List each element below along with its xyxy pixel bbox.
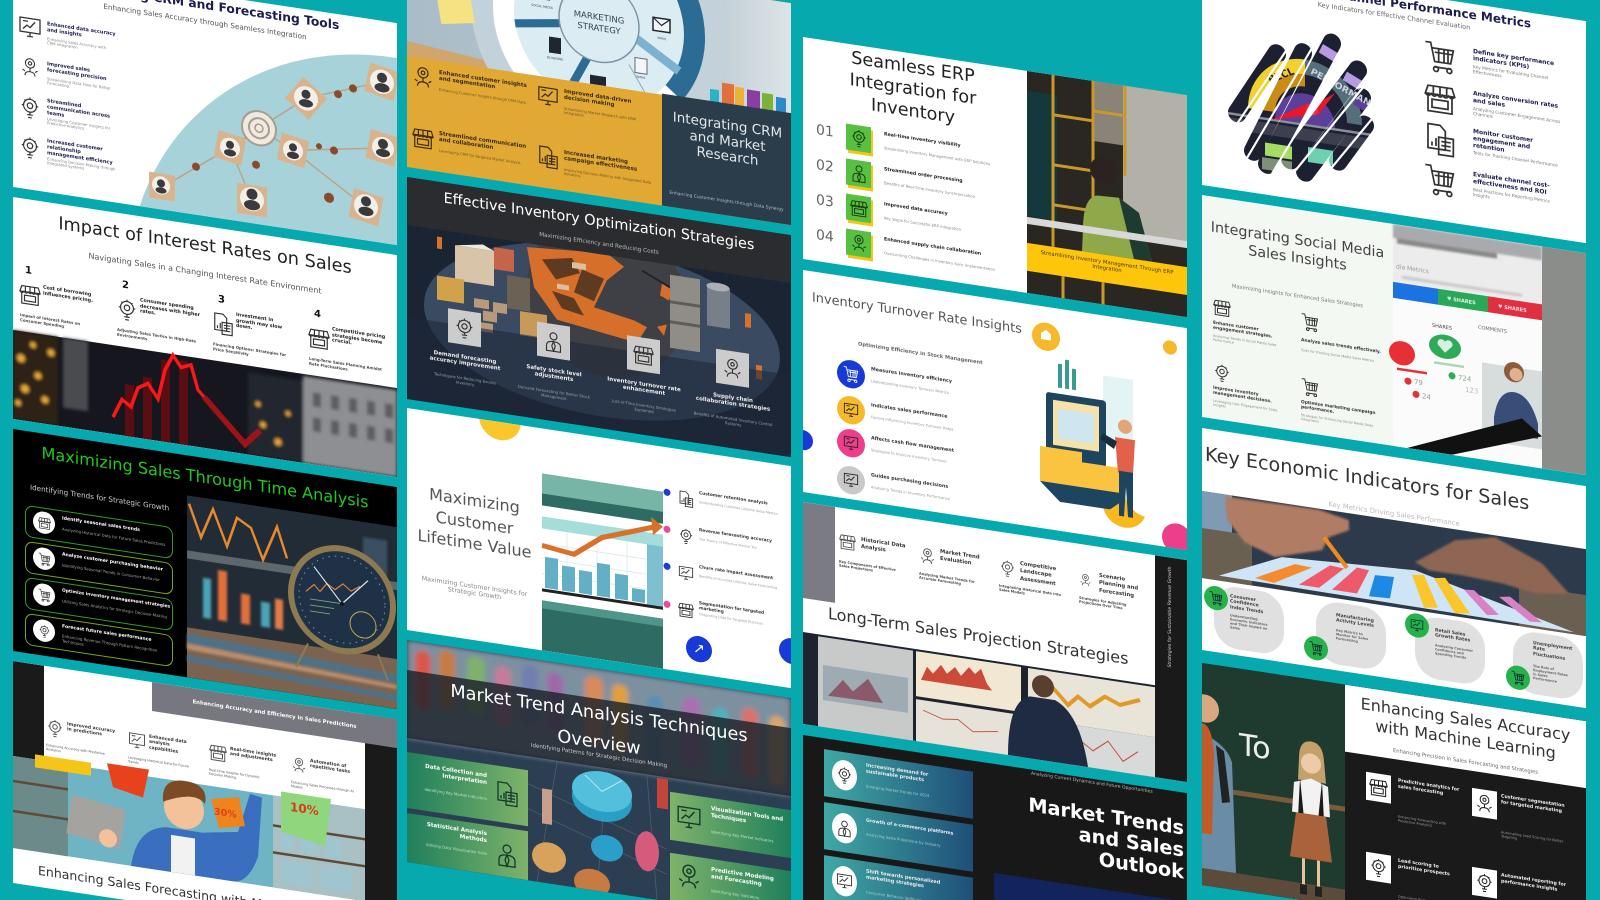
item 2: Analyzing Market Trends for Accurate Forecasting (919, 572, 975, 586)
item: relationship management: Increased customer relationship management efficiency (47, 138, 113, 166)
item: data accuracy: Enhanced data accuracy and insights (47, 21, 116, 38)
strategy 3 (607, 335, 681, 414)
item 2: Revenue forecasting accuracy (699, 528, 772, 544)
panel: market trends and sales outlook slide (803, 735, 1187, 900)
image: wooden tiles network (140, 54, 397, 246)
title: Maximizing Customer Lifetime Value (417, 484, 532, 562)
step 03: Key Steps for Successful ERP Integration (884, 215, 961, 232)
card 3: Shift towards personalized marketing strategies (866, 869, 940, 889)
item 3 (1366, 852, 1471, 900)
item 2: Customer segmentation for targeted marketing (1501, 794, 1565, 814)
item: relationship management: Enhancing Decision-Making through Integrated Systems (47, 156, 115, 171)
item 2: Automating Lead Scoring for Better Targeting (1501, 830, 1563, 844)
strategy 3: Inventory turnover rate enhancement (607, 376, 681, 398)
image: children at chalkboard: To (1238, 728, 1271, 767)
title: with Machine Learning (1375, 716, 1556, 763)
item 4: Integrating Data for Targeted Practices (699, 612, 763, 626)
item 4: Improving Decision-Making with Integrated Data Solutions (564, 168, 651, 185)
item 4 (1472, 867, 1582, 900)
item 1 (839, 531, 917, 589)
item 1: Enhancing Forecasting with Predictive Analytics (1398, 815, 1446, 828)
text panel (662, 94, 791, 225)
banner text: Enhancing Accuracy and Efficiency in Sales Predictions (193, 699, 356, 730)
step 01: Real-time inventory visibility (884, 132, 961, 149)
item 4: Optimize marketing campaign performance. (1301, 400, 1376, 416)
item 4 (539, 145, 651, 185)
image: marketing strategy wheel: EMAIL (657, 36, 667, 41)
card 2: Analyze customer purchasing behavior (62, 552, 163, 573)
metric 2: Indicates sales performance (871, 403, 948, 420)
item 2 (1472, 788, 1582, 864)
title: and Sales (1079, 823, 1184, 862)
icon: blue arrow button: ↗ (693, 640, 705, 658)
item 4: Scenario Planning and Forecasting (1099, 573, 1138, 599)
panel: market trend analysis slide (407, 640, 791, 900)
card 3: Utilizing Sales Analytics for Strategic Decision-Making (62, 598, 167, 619)
image: marketing strategy wheel: BLOGGING (547, 55, 564, 62)
item 3 (1423, 121, 1583, 184)
card 1: Identify seasonal sales trends (62, 516, 140, 533)
item 3: Lead scoring to prioritize prospects (1398, 859, 1450, 877)
item 4: 4 (314, 309, 321, 321)
title: Inventory Turnover Rate Insights (812, 290, 1022, 337)
indicator 3: Analyzing Consumer Confidence and Spending Trends (1435, 643, 1473, 660)
item 3: Leveraging CRM for Targeted Market Analysis (439, 149, 521, 165)
card 3 (824, 855, 973, 900)
step 03 (816, 189, 1021, 250)
subtitle: Identifying Trends for Strategic Growth (30, 483, 169, 513)
item: forecasting precision: Improved sales forecasting precision (47, 61, 107, 82)
item 2: Tools for Tracking Social Media Sales Metrics (1301, 348, 1374, 363)
metric 3: Strategies to Improve Inventory Turnover (871, 448, 947, 464)
subtitle: Navigating Sales in a Changing Interest Rate Environment (89, 251, 321, 296)
item 3: Churn rate impact assessment (699, 565, 773, 581)
title: Integrating CRM and Market Research (673, 109, 782, 169)
title: Effective Inventory Optimization Strategies (444, 191, 754, 254)
card 1 (824, 749, 973, 819)
panel: sales forecasting with machine learning slide (13, 661, 397, 900)
item 1: Enhance customer engagement strategies. (1213, 321, 1272, 340)
item 1: Historical Data Analysis (861, 537, 905, 554)
card 1: Increasing demand for sustainable products (866, 763, 928, 783)
technique: predictive modeling: Predictive Modeling and Forecasting (711, 867, 774, 887)
item 1: Key Metrics for Evaluating Channel Effectiveness (1473, 65, 1548, 81)
metric 4: Guides purchasing decisions (871, 473, 948, 490)
item 1 (19, 265, 93, 328)
item 4: Evaluate channel cost-effectiveness and ROI (1473, 171, 1550, 196)
technique: data collection: Identifying Key Market Indicators (424, 787, 487, 801)
image: shapes and growth chart (479, 418, 670, 669)
indicator 2 (1306, 598, 1391, 677)
technique: visualization tools: Identifying Key Market Indicators (711, 829, 774, 843)
title: Integrating Social Media (1211, 219, 1384, 262)
panel: impact of interest rates slide (13, 197, 397, 477)
technique: statistical analysis: Statistical Analysis Methods (427, 822, 487, 844)
strategy 2 (518, 322, 590, 401)
item 4: Enhancing Sales Processes through AI Models (291, 780, 354, 794)
chart: striped performance gauge: RECL (1266, 66, 1297, 86)
item 1 (46, 720, 115, 756)
item 4 (1301, 376, 1386, 439)
card 2: Growth of e-commerce platforms (866, 819, 953, 837)
title (850, 48, 976, 128)
vertical caption: Strategies for Sustainable Revenue Growth (1168, 566, 1173, 668)
panel: inventory optimization slide (407, 177, 791, 457)
item: data accuracy (19, 16, 116, 50)
panel: long-term sales projection slide (803, 502, 1187, 782)
image: marketing strategy wheel: MARKETING (574, 9, 624, 27)
item 1: Key Components of Effective Sales Projections (839, 559, 896, 573)
title: Enhancing Sales Accuracy (1361, 694, 1570, 745)
panel: key economic indicators slide (1202, 428, 1586, 708)
step 02: 02 (816, 157, 834, 176)
card 4: Enhancing Revenue Through Pattern Recognition Techniques (62, 633, 157, 653)
item 2 (128, 732, 189, 769)
technique: statistical analysis (426, 822, 516, 868)
image: blurred social media dashboard: SHARES (1432, 323, 1452, 332)
banner text: Streamlining Inventory Management Through ERP Integration (1041, 250, 1173, 276)
image: person with clipboard and decorative circles (803, 270, 1187, 550)
item 4 (291, 758, 354, 794)
item 2 (1423, 80, 1583, 143)
step 01: Streamlining Inventory Management with ERP Solutions (884, 145, 990, 166)
image: blurred bokeh and pie chart table (407, 640, 791, 900)
indicator 4: The Role of Employment Rates in Sales Performance (1533, 664, 1568, 683)
title: Long-Term Sales Projection Strategies (828, 604, 1128, 668)
item 3 (412, 128, 526, 165)
technique: statistical analysis: Utilizing Data Visualization Tools (426, 842, 487, 856)
strategy 1 (430, 308, 500, 387)
image: side strips, shop and cartoon shopper: 10% (290, 800, 319, 818)
title: Integration for (850, 70, 976, 109)
item 4 (1079, 568, 1155, 625)
metric 2: Factors Influencing Inventory Turnover Rates (871, 415, 953, 432)
item 3 (209, 744, 276, 780)
image: analyst in front of screens, side strips (803, 502, 1187, 782)
subtitle: Enhancing Precision in Sales Forecasting and Strategies (1393, 748, 1538, 776)
item 1: Understanding Customer Lifetime Value Metrics (699, 500, 778, 516)
item 4: Strategies for Enhancing Social Media Sales Integration (1301, 413, 1373, 428)
item 2: Analyzing Customer Engagement Across Channels (1473, 107, 1560, 125)
chart: striped performance gauge: PERFORMANCE (1309, 67, 1384, 115)
item 1 (680, 490, 778, 516)
image: children at chalkboard (1202, 663, 1586, 900)
item 1: Cost of borrowing influences pricing. (43, 286, 93, 304)
card 3: Optimize inventory management strategies (62, 588, 170, 610)
title: Outlook (1099, 848, 1184, 884)
item: forecasting precision (22, 58, 111, 91)
icon: second blue button (779, 636, 805, 666)
image: orange globe and warehouse models (407, 177, 791, 457)
subtitle: Enhancing Sales Accuracy through Seamless Integration (103, 2, 307, 41)
image: blurred social media dashboard: 724 (1458, 373, 1472, 384)
item 3 (213, 294, 286, 357)
technique: predictive modeling: Identifying Key Indicators (711, 888, 759, 900)
image: blurred social media dashboard: COMMENTS (1478, 325, 1507, 335)
subtitle: Enhancing Customer Insights through Data Synergy (669, 191, 784, 213)
card 2 (25, 541, 173, 595)
card 2 (824, 802, 973, 872)
item 1 (1366, 772, 1471, 848)
item 2: 2 (122, 279, 129, 292)
item 2 (117, 279, 200, 344)
item 4: Long-Term Sales Planning Amidst Rate Fluctuations (309, 356, 382, 372)
title: Sales Insights (1248, 243, 1347, 274)
indicator 1: Consumer Confidence Index Trends (1230, 594, 1263, 615)
item 4 (308, 309, 385, 372)
step 04: 04 (816, 227, 834, 246)
card 1: Emerging Market Trends for 2024 (866, 784, 929, 798)
item 2: Improved data-driven decision making (564, 89, 631, 109)
image: hand drawing bar chart (1202, 428, 1586, 708)
item 1: Improved accuracy in predictions (67, 722, 115, 738)
image: blurred social media dashboard (1202, 195, 1586, 475)
strategy 1: Techniques for Reducing Excess Inventory (434, 371, 496, 387)
item 4: Automated reporting for performance insights (1501, 873, 1566, 892)
item: relationship management (22, 137, 116, 171)
strategy 2: Safety stock level adjustments (526, 364, 582, 384)
panel: social media sales insights slide (1202, 195, 1586, 475)
image: blurred social media dashboard: 123 (1465, 385, 1478, 396)
item 3: Competitive Landscape Assessment (1020, 561, 1056, 587)
image: blurred social media dashboard: ♥ SHARES (1447, 296, 1476, 306)
item 2: Market Trend Evaluation (940, 549, 980, 567)
item 2: Leveraging Historical Data for Future Trends (128, 755, 189, 769)
title (1202, 217, 1393, 282)
subtitle: Maximizing Insights for Enhanced Sales Strategies (1232, 284, 1363, 309)
image: marketing strategy wheel (407, 0, 791, 114)
image: side strips, shop and cartoon shopper: 30% (214, 806, 237, 821)
panel: customer lifetime value slide (407, 408, 791, 688)
image: side strips, shop and cartoon shopper (13, 661, 397, 900)
subtitle: Maximizing Efficiency and Reducing Costs (539, 232, 659, 256)
step 02: Streamlined order processing (884, 167, 963, 184)
indicator 1 (1204, 582, 1289, 661)
indicator 2: Manufacturing Activity Levels (1336, 613, 1374, 629)
card 1 (25, 505, 173, 559)
title: Market Trends (1028, 793, 1184, 840)
image: blurred social media dashboard: dia Metrics (1396, 263, 1429, 275)
icon: blue arrow button (686, 634, 712, 664)
item 2: Streamlining Market Research with CRM Integration (564, 107, 636, 122)
banner (152, 682, 397, 748)
panel: sales accuracy with machine learning slide (1202, 663, 1586, 900)
item 3: Improve inventory management decisions. (1213, 386, 1272, 405)
item 4: Strategies for Adjusting Projections Over Time (1079, 596, 1126, 610)
indicator 4 (1503, 628, 1586, 706)
card 4: Forecast future sales performance (62, 624, 152, 643)
metric 2 (837, 394, 987, 445)
item: communication: Leveraging Customer Insights for Predictive Analytics (47, 116, 110, 131)
item 4: Automation of repetitive tasks (310, 759, 350, 775)
title: Overview (557, 727, 641, 759)
panel: time analysis slide (13, 429, 397, 709)
strategy 3: Just-in-Time Inventory Strategies Explained (612, 398, 676, 414)
technique: visualization tools: Visualization Tools and Techniques (711, 806, 783, 824)
image: warehouse worker (1027, 71, 1187, 318)
card 3 (25, 577, 173, 631)
subtitle: Key Indicators for Effective Channel Evaluation (1318, 1, 1470, 32)
item 2: Adjusting Sales Tactics in High-Rate Environments (117, 327, 196, 344)
item: forecasting precision: Streamlining Data Flow for Better Forecasting (47, 76, 111, 91)
technique: data collection (424, 764, 518, 808)
panel: seamless ERP integration slide (803, 37, 1187, 317)
image: blurred social media dashboard: 24 (1422, 391, 1431, 402)
image: marketing strategy wheel: STRATEGY (577, 21, 621, 37)
item 3: Real-time insights and adjustments (230, 747, 276, 764)
metric 3: Affects cash flow management (871, 436, 954, 454)
item 2 (538, 86, 636, 122)
item 1: Impact of Interest Rates on Consumer Spending (20, 312, 80, 328)
step 04 (816, 224, 1021, 285)
strategy 2: Demand Forecasting for Better Stock Management (518, 384, 590, 401)
item 2: Analyze sales trends effectively. (1301, 338, 1381, 355)
strategy 1: Demand forecasting accuracy improvement (430, 350, 500, 373)
item 3 (1213, 362, 1293, 424)
panel: integrating CRM and market research slide (407, 0, 791, 225)
item 3: 3 (218, 294, 225, 306)
item 4: Competitive pricing strategies become crucial. (332, 327, 385, 347)
step 03: Improved data accuracy (884, 202, 948, 217)
technique: predictive modeling (679, 864, 774, 900)
subtitle: Key Metrics Driving Sales Performance (1328, 500, 1460, 528)
step 02: Benefits of Real-Time Inventory Synchronization (884, 180, 975, 199)
item 3: Integrating Historical Data into Sales Models (999, 584, 1061, 597)
step 04: Overcoming Challenges in Inventory Sync Implementation (884, 250, 995, 272)
strategy 4: Supply chain collaboration strategies (696, 392, 770, 413)
item 1: Predictive analytics for sales forecasting (1398, 779, 1459, 796)
title (983, 787, 1184, 884)
item 3: Financing Options: Strategies for Price Sensitivity (213, 341, 286, 357)
metric 1 (837, 358, 987, 409)
metric 1: Understanding Inventory Turnover Metrics (871, 379, 949, 395)
item: data accuracy: Enhancing Sales Accuracy with CRM Integration (47, 36, 106, 50)
image: blurred social media dashboard: ♥ SHARES (1498, 304, 1527, 314)
panel: channel performance metrics slide (1202, 0, 1586, 243)
item 2: Analyze conversion rates and sales (1473, 90, 1558, 110)
item 3: Investment in growth may slow down. (236, 313, 282, 332)
indicator 3 (1405, 613, 1490, 692)
indicator 3: Retail Sales Growth Rates (1435, 628, 1470, 644)
item 3: Leveraging User Engagement for Sales Insights (1213, 399, 1277, 412)
item 1: Enhancing Accuracy with Predictive Analytics (46, 743, 105, 756)
item 3 (999, 556, 1077, 613)
step 01: 01 (816, 122, 834, 141)
indicator 4: Unemployment Rate Fluctuations (1533, 641, 1572, 662)
item 1: Enhancing Customer Insights through CRM Data (439, 88, 526, 105)
title: Key Economic Indicators for Sales (1205, 442, 1529, 515)
item 4 (678, 601, 764, 626)
card 4 (25, 613, 173, 667)
item 1 (414, 67, 527, 105)
item 4 (1423, 161, 1583, 224)
image: marketing strategy wheel: SOCIAL MEDIA (531, 3, 554, 10)
image: marketing strategy wheel: EMAIL (636, 75, 646, 80)
item 1 (1423, 38, 1583, 101)
step 03: 03 (816, 192, 834, 211)
item 1: Customer retention analysis (699, 491, 768, 507)
item: communication (22, 97, 110, 131)
item 4: Increased marketing campaign effectiveness (564, 150, 637, 173)
item 2 (919, 544, 997, 601)
indicator 1: Understanding Economic Indicators and Their Impact on Sales (1230, 613, 1267, 631)
title: Seamless ERP (851, 48, 975, 87)
panel: inventory turnover slide (803, 270, 1187, 550)
image: navy photo (803, 735, 1187, 900)
card 2: Identifying Seasonal Trends in Consumer Behavior (62, 562, 160, 582)
title: Inventory (871, 95, 955, 128)
item 3 (678, 565, 777, 590)
title: Market Trend Analysis Techniques (450, 682, 748, 747)
image: blurred social media dashboard: 79 (1414, 377, 1423, 387)
item 2: The Theory of Effective Precise Too (699, 537, 757, 550)
item 3: Monitor customer engagement and retention (1473, 128, 1533, 154)
item 1: Define key performance indicators (KPIs) (1473, 48, 1554, 71)
technique: visualization tools (677, 806, 783, 843)
subtitle: Maximizing Customer Insights for Strategic Growth (422, 575, 527, 602)
item 1: Analyzing Trends in Social Media Sales Performance (1213, 334, 1276, 347)
subtitle: Optimizing Efficiency in Stock Management (858, 341, 983, 366)
metric 4 (837, 464, 987, 515)
item 4: Best Practices for Reporting Metrics Insights (1473, 188, 1550, 205)
item: communication: Streamlined communication across teams (47, 98, 110, 120)
subtitle: Analyzing Current Dynamics and Future Opportunities (1031, 771, 1153, 795)
step 02 (816, 154, 1021, 215)
card 2: Analyzing Sales Projections by Industry (866, 832, 940, 848)
title: Impact of Interest Rates on Sales (58, 214, 352, 278)
item 3: Tools for Tracking Channel Performance (1473, 151, 1558, 169)
subtitle: Identifying Patterns for Strategic Decision Making (531, 743, 667, 769)
item 3: Real-time Insights for Dynamic Decision Making (209, 768, 260, 780)
card 1: Analyzing Historical Data for Future Sales Predictions (62, 526, 165, 547)
item 1 (1213, 297, 1293, 359)
item 1: 1 (25, 265, 32, 277)
metric 4: Analyzing Trends in Inventory Performance (871, 485, 950, 501)
step 01 (816, 122, 990, 166)
panel: CRM and forecasting tools slide (13, 0, 397, 245)
image: clock and market charts (185, 495, 397, 709)
title (1345, 692, 1586, 768)
chart: striped performance gauge (1228, 34, 1374, 182)
strategy 4: Benefits of Automated Inventory Control Systems (694, 410, 772, 427)
item 2 (1301, 311, 1386, 374)
item 2: Enhanced data analysis capabilities (149, 735, 187, 755)
item 1: Enhanced customer insights and segmentation (439, 70, 527, 91)
strategy 4 (694, 348, 772, 427)
item 2 (680, 528, 772, 550)
technique: data collection: Data Collection and Interpretation (425, 764, 487, 786)
item 3: Benefits of Accurate Lifetime Value Forecasting (699, 574, 777, 590)
indicator 2: Key Metrics to Monitor for Sales Forecasting (1336, 628, 1368, 643)
item 3: Streamlined communication and collaboration (439, 131, 526, 152)
item 4: Segmentation for targeted marketing (699, 601, 764, 616)
item 2: Consumer spending decreases with higher rates. (140, 298, 200, 318)
step 04: Enhanced supply chain collaboration (884, 237, 981, 257)
title: Maximizing Sales Through Time Analysis (42, 443, 368, 512)
metric 3 (837, 427, 987, 478)
metric 1: Measures inventory efficiency (871, 367, 952, 385)
image: city with falling red chart (13, 328, 397, 477)
